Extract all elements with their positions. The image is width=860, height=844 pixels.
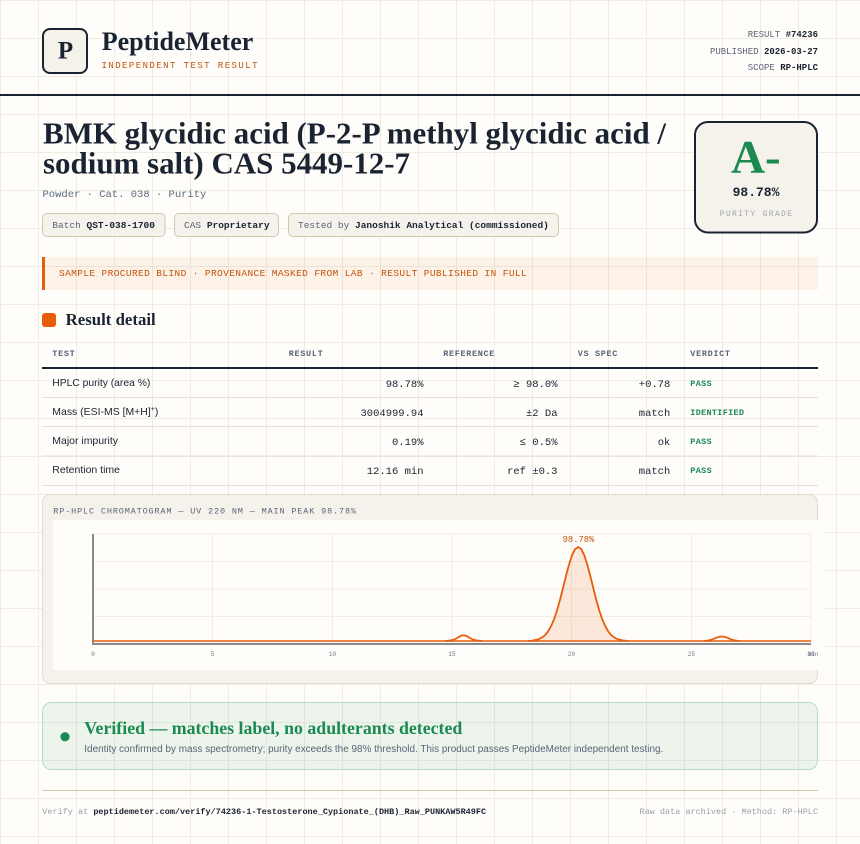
product title: [43, 115, 666, 180]
chromatogram trace: [445, 547, 739, 641]
row: major impurity: PASS: [690, 437, 712, 447]
blind sample notice: [42, 257, 818, 290]
row: HPLC purity: ≥ 98.0%: [513, 379, 558, 391]
result metadata: SCOPE RP-HPLC: [748, 63, 819, 73]
chip: batch: [42, 214, 165, 236]
footer verify link: Verify at peptidemeter.com/verify/74236-1-Testosterone_Cypionate_(DHB)_Raw_PUNKAW5R49FC: [42, 807, 486, 817]
peak label: 98.78%: [563, 535, 595, 545]
product title: sodium salt) CAS 5449-12-7: [43, 145, 410, 180]
grade card: A-: [731, 132, 781, 184]
row: HPLC purity: PASS: [690, 379, 712, 389]
row: mass: +: [151, 406, 155, 413]
row: HPLC purity: +0.78: [639, 379, 670, 391]
x axis labels: 10: [329, 651, 336, 658]
x axis labels: 15: [448, 651, 456, 658]
table header: RESULT: [289, 349, 323, 359]
row: retention time: PASS: [690, 466, 712, 476]
x axis labels: 20: [568, 651, 575, 658]
table header: [52, 349, 730, 359]
row: HPLC purity: [52, 377, 712, 391]
row: mass: match: [639, 408, 670, 420]
verified description: Identity confirmed by mass spectrometry; purity exceeds the 98% threshold. This product passes PeptideMeter independent testing.: [84, 744, 663, 755]
row: major impurity: 0.19%: [392, 437, 424, 449]
table header: VS SPEC: [578, 349, 617, 359]
row: mass: Mass (ESI-MS [M+H]: [52, 406, 151, 418]
x axis: [92, 643, 811, 645]
blind sample notice: SAMPLE PROCURED BLIND · PROVENANCE MASKED FROM LAB · RESULT PUBLISHED IN FULL: [59, 268, 527, 279]
chip: batch: Batch QST-038-1700: [52, 220, 155, 231]
row: major impurity: ≤ 0.5%: [520, 437, 558, 449]
x axis labels: 30: [807, 651, 815, 658]
result metadata: RESULT #74236: [748, 30, 818, 40]
baseline trace: [93, 640, 811, 642]
row: mass: ±2 Da: [526, 408, 558, 420]
chart title: RP-HPLC CHROMATOGRAM — UV 220 NM — MAIN PEAK 98.78%: [53, 506, 357, 516]
row: mass: [52, 406, 744, 420]
table header: VERDICT: [690, 349, 730, 359]
status dot: [60, 732, 70, 741]
grade card: 98.78%: [733, 185, 780, 200]
chromatogram panel: [42, 494, 825, 684]
footer method note: Raw data archived · Method: RP-HPLC: [639, 807, 818, 817]
row: mass: ): [155, 406, 158, 418]
main peak fill: [528, 547, 628, 641]
row: mass: IDENTIFIED: [690, 408, 744, 418]
result metadata: PUBLISHED 2026-03-27: [710, 47, 818, 57]
logo mark: [43, 29, 87, 73]
header: [43, 27, 819, 73]
chip: tested by: Tested by Janoshik Analytical (commissioned): [298, 220, 549, 231]
results table: [42, 349, 818, 486]
chip: CAS: [174, 214, 278, 236]
x axis labels: [91, 651, 819, 658]
x axis labels: min: [808, 651, 819, 658]
row: retention time: [52, 464, 712, 478]
row: retention time: 12.16 min: [367, 466, 424, 478]
row: major impurity: [52, 435, 712, 449]
row: major impurity: ok: [658, 437, 670, 449]
chromatogram chart: [91, 534, 819, 658]
result metadata: [710, 30, 819, 73]
row: retention time: ref ±0.3: [507, 466, 558, 478]
row: major impurity: Major impurity: [52, 435, 119, 447]
verified banner: [42, 702, 818, 770]
product subtitle: Powder · Cat. 038 · Purity: [42, 189, 206, 201]
verified heading: Verified — matches label, no adulterants detected: [84, 718, 463, 738]
row: mass: 3004999.94: [360, 408, 424, 420]
row: HPLC purity: HPLC purity (area %): [52, 377, 150, 389]
table header: TEST: [52, 349, 75, 359]
brand name: PeptideMeter: [102, 27, 253, 56]
row: retention time: Retention time: [52, 464, 120, 476]
x axis labels: 25: [688, 651, 695, 658]
y axis: [92, 534, 94, 645]
grade card: PURITY GRADE: [720, 210, 792, 219]
section heading: Result detail: [66, 310, 156, 329]
x axis labels: 0: [91, 651, 95, 658]
logo mark: P: [58, 38, 73, 65]
table header: REFERENCE: [443, 349, 494, 359]
row: retention time: match: [639, 466, 670, 478]
chip: CAS: CAS Proprietary: [184, 220, 270, 231]
chip: tested by: [288, 214, 558, 236]
product title: BMK glycidic acid (P-2-P methyl glycidic acid /: [43, 115, 666, 150]
row: HPLC purity: 98.78%: [386, 379, 424, 391]
brand tagline: INDEPENDENT TEST RESULT: [102, 61, 258, 71]
grade card: [695, 122, 817, 232]
x axis labels: 5: [211, 651, 215, 658]
